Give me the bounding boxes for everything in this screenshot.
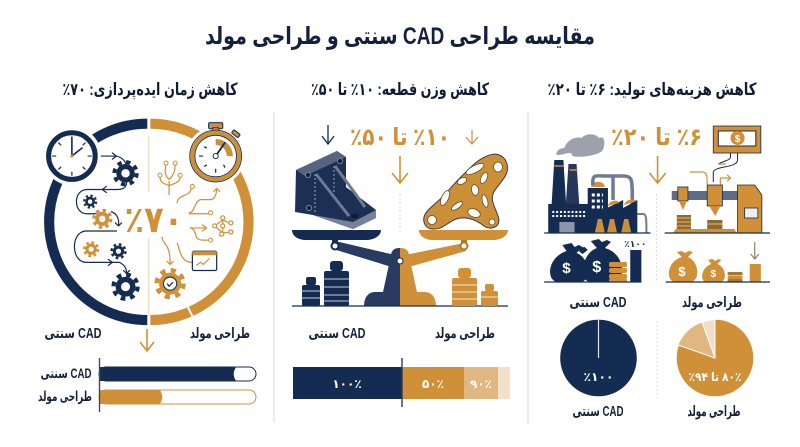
icon: solid bracket bbox=[295, 151, 376, 229]
flow: generative branches bbox=[158, 161, 220, 264]
icon: generative bracket bbox=[424, 154, 507, 229]
icon: navy weights bbox=[302, 261, 349, 306]
bar: traditional bbox=[99, 367, 256, 381]
stat: 70 percent: ؜۷۰٪ bbox=[125, 199, 183, 240]
bar: generative bbox=[99, 390, 256, 404]
value: 50: ۵۰٪ bbox=[422, 377, 444, 391]
icon: check gear bbox=[157, 270, 183, 297]
chart: time bars bbox=[38, 358, 256, 412]
heading: part weight: کاهش وزن قطعه: ۱۰٪ تا ۵۰٪ bbox=[311, 80, 489, 100]
chart: stacked weight bar bbox=[293, 358, 510, 407]
icon: clock bbox=[43, 127, 101, 185]
stat: 10 to 50 percent: ؜۱۰٪ تا ۵۰٪ bbox=[350, 124, 450, 151]
icon: navy money bags: $ bbox=[562, 260, 571, 277]
icon: banknote bbox=[713, 126, 761, 153]
segment: 50 percent bbox=[402, 367, 464, 399]
label: generative: طراحی مولد bbox=[688, 404, 740, 420]
label: generative: طراحی مولد bbox=[682, 295, 742, 311]
bar label: generative: طراحی مولد bbox=[38, 389, 92, 404]
panel: part weight bbox=[292, 80, 510, 407]
icon: smoke bbox=[556, 134, 604, 157]
label: traditional CAD: CAD سنتی bbox=[44, 326, 102, 342]
icon: banknote: $ bbox=[735, 134, 741, 145]
icon: orange money bags bbox=[666, 242, 770, 282]
value: 100 percent: ؜۱۰۰٪ bbox=[624, 239, 646, 249]
icon: 3D printer bbox=[665, 153, 770, 233]
label: generative: طراحی مولد bbox=[190, 326, 250, 342]
arrow: navy down bbox=[322, 125, 334, 144]
illustration: factories and printers bbox=[544, 124, 770, 282]
icon: orange money bags: $ bbox=[678, 264, 686, 279]
arrow: down bbox=[140, 329, 154, 351]
heading: ideation time: کاهش زمان ایده‌پردازی: ۷۰٪ bbox=[62, 80, 238, 100]
label: generative: طراحی مولد bbox=[435, 326, 495, 342]
icon: node network bbox=[213, 216, 233, 236]
segment: 90 percent bbox=[464, 367, 498, 399]
value: 90: ۹۰٪ bbox=[470, 377, 492, 391]
ring: generative half bbox=[150, 124, 249, 320]
icon: navy money bags bbox=[544, 239, 641, 282]
arrow: orange down bbox=[466, 130, 478, 144]
heading: production cost: کاهش هزینه‌های تولید: ۶٪ تا ۲۰٪ bbox=[548, 80, 757, 100]
arrow: down bbox=[649, 156, 666, 183]
label: traditional CAD: CAD سنتی bbox=[308, 326, 366, 342]
segment: 100 percent bbox=[293, 367, 402, 399]
arrow: centre down bbox=[392, 156, 408, 183]
panel: production cost bbox=[544, 80, 770, 420]
icon: orange money bags: $ bbox=[710, 269, 716, 280]
flow: traditional process bbox=[74, 153, 138, 299]
icon: factory bbox=[544, 160, 650, 233]
value: 100: ۱۰۰٪ bbox=[332, 377, 362, 391]
ring: traditional half bbox=[49, 124, 147, 320]
value: 100 percent: ؜۱۰۰٪ bbox=[584, 370, 614, 384]
chart: generative pie bbox=[677, 320, 753, 396]
icon: navy money bags: $ bbox=[592, 258, 601, 276]
bar label: traditional: CAD سنتی bbox=[40, 366, 92, 381]
icon: orange weights bbox=[452, 268, 498, 306]
icon: stopwatch bbox=[186, 123, 245, 185]
title: مقایسه طراحی CAD سنتی و طراحی مولد bbox=[205, 23, 595, 50]
chart: traditional pie bbox=[560, 320, 637, 396]
label: traditional CAD: CAD سنتی bbox=[572, 404, 624, 420]
panel: ideation time bbox=[38, 80, 256, 412]
value: 80 to 94 percent: ۸۰٪ تا ۹۴٪ bbox=[688, 370, 742, 384]
icon: balance scale bbox=[292, 230, 508, 306]
diagram: ideation circle bbox=[43, 123, 249, 320]
label: traditional CAD: CAD سنتی bbox=[570, 295, 626, 311]
stat: 6 to 20 percent: ؜۶٪ تا ۲۰٪ bbox=[611, 124, 702, 151]
icon: chart window bbox=[192, 251, 217, 270]
